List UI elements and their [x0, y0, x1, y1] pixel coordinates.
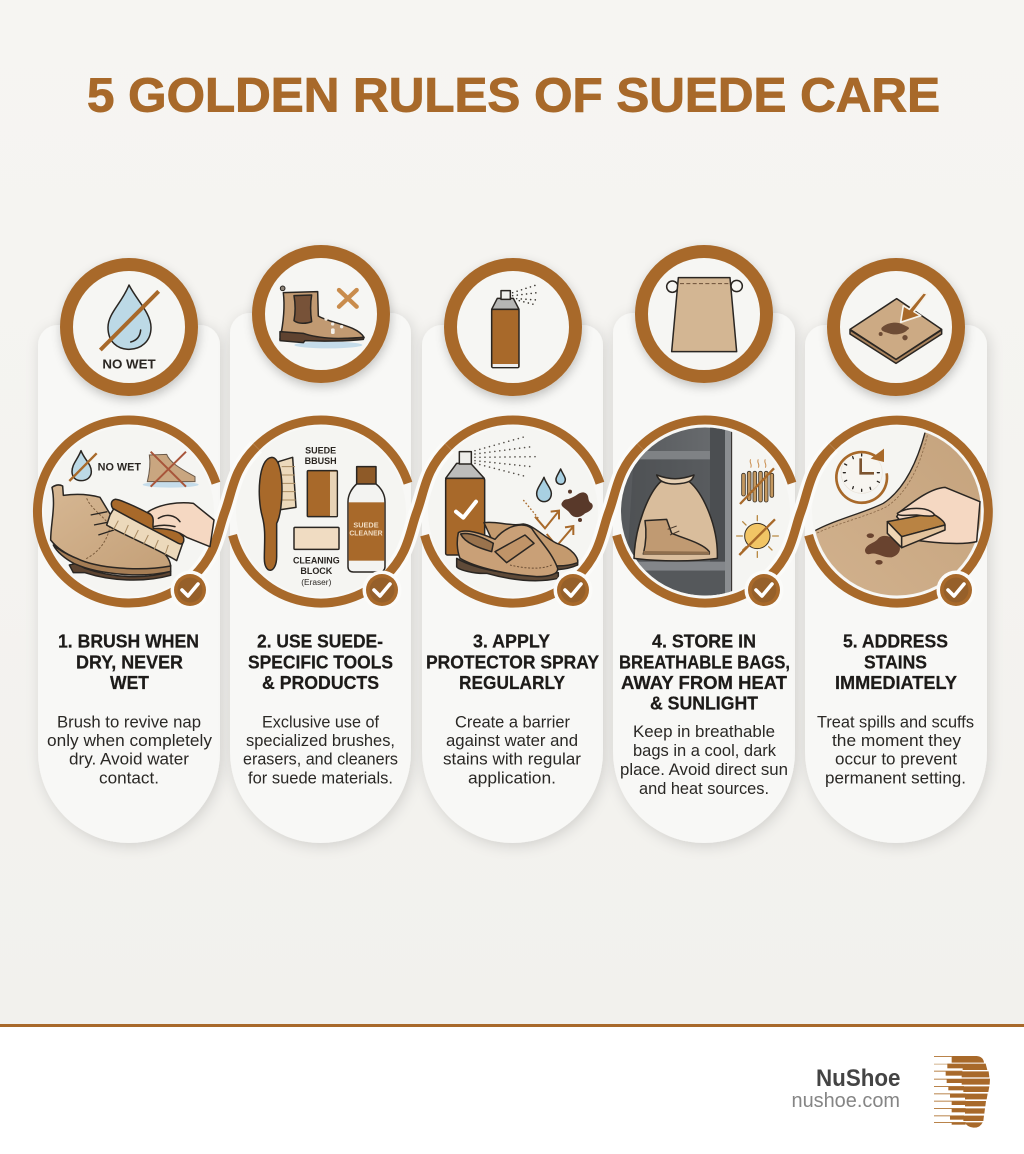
heading: rule 4: 4. STORE IN — [652, 630, 756, 651]
text: rule 5 description: permanent setting. — [825, 768, 966, 787]
heading: rule 2: SPECIFIC TOOLS — [248, 652, 393, 672]
text: rule 5 description: the moment they — [832, 731, 962, 750]
illustration: brushing a dry boot — [51, 451, 214, 580]
footer band — [0, 1024, 1024, 1154]
footer brand name: NuShoe — [816, 1065, 900, 1092]
text: rule 3 description — [443, 712, 581, 787]
text: rule 4 description — [620, 722, 788, 798]
wave ring connecting illustrations — [37, 420, 988, 603]
heading: rule 1: DRY, NEVER — [76, 652, 184, 672]
heading: rule 3: REGULARLY — [459, 672, 566, 693]
check badge: rule 4 — [744, 570, 784, 610]
check badge: rule 2 — [362, 570, 402, 610]
title: 5 GOLDEN RULES OF SUEDE CARE — [87, 70, 940, 122]
text: rule 5 description: Treat spills and scuffs — [817, 712, 974, 731]
text: rule 2 description: specialized brushes, — [246, 731, 395, 750]
check badge: rule 5 — [936, 570, 976, 610]
text: rule 5 description — [817, 712, 974, 787]
text: rule 1 description: contact. — [99, 768, 159, 787]
text: rule 3 description: stains with regular — [443, 750, 581, 769]
panel: rule 3 — [422, 325, 603, 843]
illustration: suede care tools: CLEANER — [349, 529, 383, 538]
heading: rule 4: AWAY FROM HEAT — [621, 672, 788, 693]
illustration: suede care tools: SUEDE — [353, 520, 379, 529]
illustration: protector spray with loafers — [446, 437, 593, 581]
text: rule 4 description: Keep in breathable — [633, 722, 775, 741]
illustration: suede care tools: SUEDE — [305, 445, 336, 455]
heading: rule 2: & PRODUCTS — [262, 672, 379, 693]
text: rule 3 description: Create a barrier — [455, 712, 570, 731]
heading: rule 3: PROTECTOR SPRAY — [426, 652, 600, 672]
text: rule 3 description: application. — [468, 768, 556, 787]
heading: rule 1 — [58, 630, 199, 693]
illustration: suede care tools: BBUSH — [305, 456, 337, 466]
panel: rule 2 — [230, 313, 411, 843]
check badge: rule 3 — [554, 570, 592, 610]
illustration backgrounds — [44, 426, 982, 596]
panel: rule 4 — [613, 313, 795, 843]
text: rule 2 description — [243, 712, 398, 787]
heading: rule 5: 5. ADDRESS — [843, 630, 948, 651]
heading: rule 3: 3. APPLY — [473, 630, 551, 651]
text: rule 2 description: Exclusive use of — [262, 712, 379, 731]
illustration: suede care tools: CLEANING — [293, 555, 340, 565]
icon: protector spray can — [492, 285, 537, 368]
heading: rule 4: & SUNLIGHT — [650, 693, 759, 714]
text: rule 5 description: occur to prevent — [835, 750, 957, 769]
text: rule 1 description: only when completely — [47, 731, 213, 750]
text: rule 4 description: place. Avoid direct sun — [620, 760, 788, 779]
heading: rule 5: IMMEDIATELY — [835, 672, 958, 693]
heading: rule 5: STAINS — [864, 652, 927, 672]
text: rule 2 description: for suede materials. — [248, 768, 393, 787]
illustration: treating a stain immediately — [815, 432, 981, 596]
text: rule 1 description: dry. Avoid water — [69, 750, 189, 769]
icon: no wet drop: NO WET — [102, 358, 156, 372]
illustration: suede care tools: (Eraser) — [301, 577, 332, 587]
check badge: rule 1 — [170, 570, 210, 610]
logo: striped foot — [934, 1056, 990, 1128]
text: rule 1 description: Brush to revive nap — [57, 712, 201, 731]
heading: rule 1: 1. BRUSH WHEN — [58, 630, 199, 651]
panel: rule 5 — [805, 325, 987, 843]
footer website: nushoe.com — [792, 1090, 900, 1112]
icon: drawstring storage bag — [667, 278, 742, 352]
icon: stained suede swatch — [850, 293, 942, 363]
illustration: bag on a closet shelf — [617, 423, 778, 597]
text: rule 1 description — [47, 712, 213, 787]
heading: rule 2: 2. USE SUEDE- — [257, 630, 383, 651]
heading: rule 2 — [248, 630, 393, 693]
illustration: suede care tools: BLOCK — [300, 566, 333, 576]
heading: rule 4 — [619, 630, 790, 714]
heading: rule 1: WET — [110, 672, 150, 693]
icon: no wet drop — [100, 285, 159, 372]
panel: rule 1 — [38, 325, 220, 843]
illustration: suede care tools — [259, 445, 385, 587]
heading: rule 3 — [426, 630, 600, 693]
top medallion rings — [66, 252, 958, 390]
text: rule 3 description: against water and — [446, 731, 578, 750]
text: rule 4 description: bags in a cool, dark — [633, 741, 776, 760]
text: rule 2 description: erasers, and cleaners — [243, 750, 398, 769]
illustration: brushing a dry boot: NO WET — [98, 462, 141, 474]
heading: rule 4: BREATHABLE BAGS, — [619, 652, 790, 672]
text: rule 4 description: and heat sources. — [639, 779, 769, 798]
icon: water-stained chelsea boot — [280, 286, 364, 348]
heading: rule 5 — [835, 630, 958, 693]
